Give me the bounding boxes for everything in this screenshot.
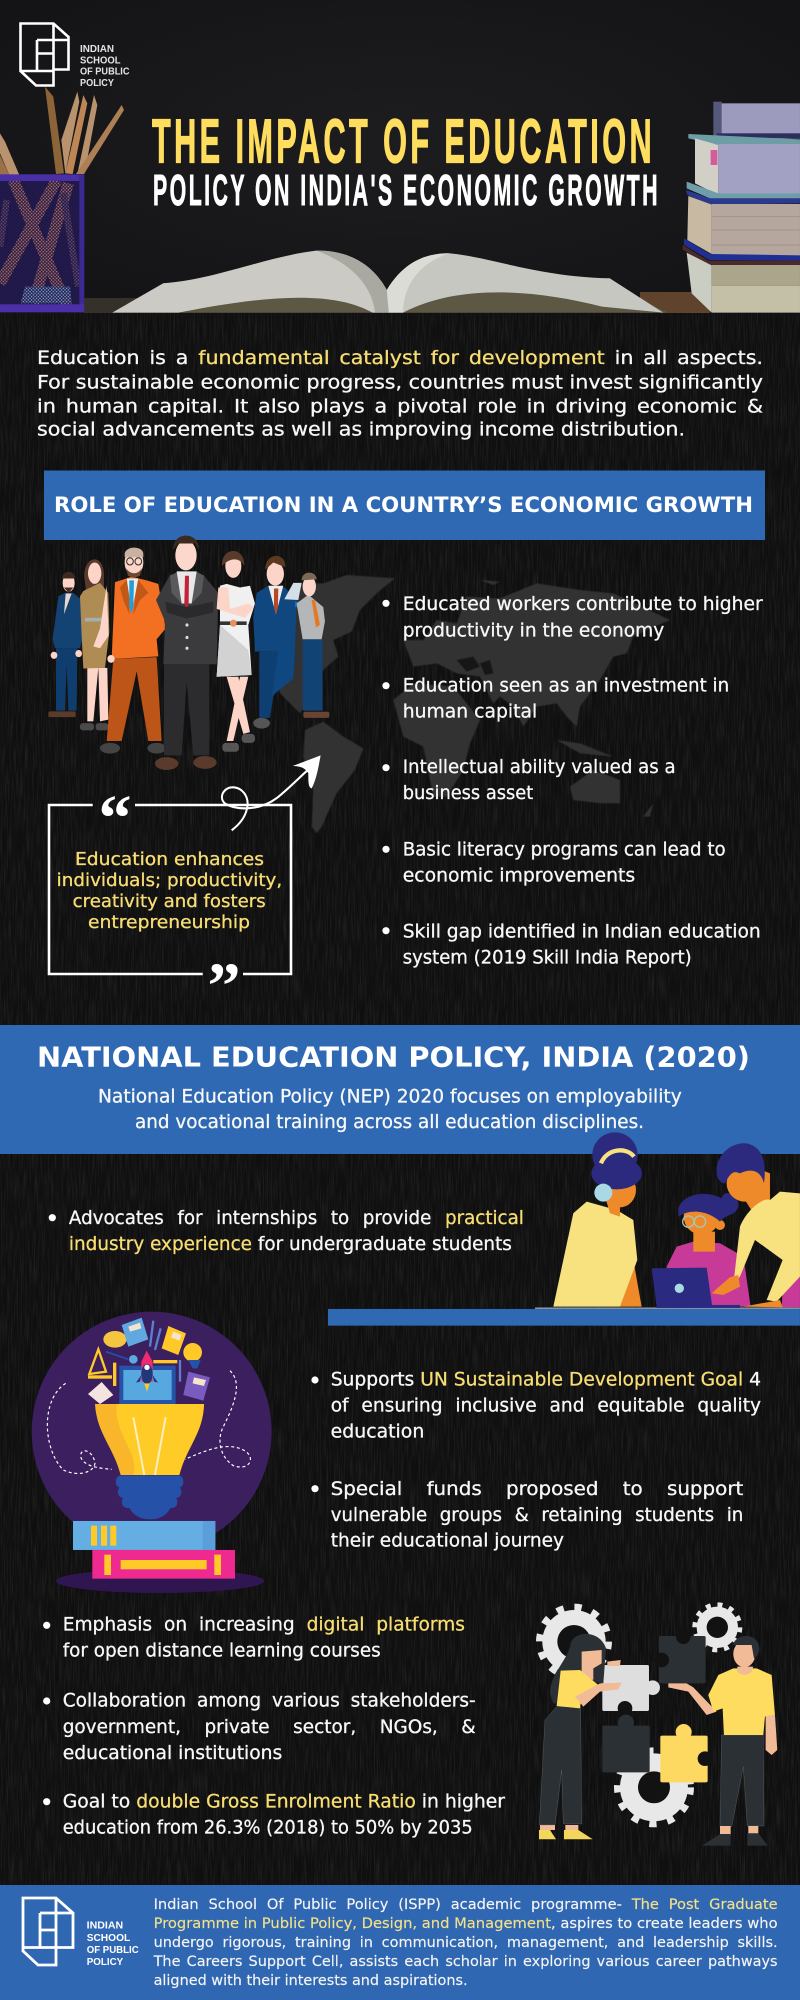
header panel xyxy=(0,0,800,313)
bullet list: SDG and funds xyxy=(311,1370,761,1552)
intro paragraph: For sustainable economic progress, countries must invest significantly xyxy=(37,372,763,393)
footer logo wordmark: OF PUBLIC xyxy=(87,1944,139,1956)
footer logo wordmark: POLICY xyxy=(87,1956,123,1968)
bullet list: role of education: business asset xyxy=(403,783,533,804)
bullet list: role of education: Skill gap identified in Indian education xyxy=(403,921,761,942)
footer logo wordmark: INDIAN xyxy=(87,1919,123,1931)
illustration: students with laptop xyxy=(328,1132,800,1326)
footer text: Indian School Of Public Policy (ISPP) academic programme- The Post Graduate xyxy=(154,1897,778,1913)
footer text xyxy=(153,1897,778,1989)
logo: Indian School of Public Policy xyxy=(20,24,130,89)
arrow: curly arrow to map xyxy=(222,755,321,830)
bullet list: role of education: economic improvements xyxy=(403,865,635,886)
logo wordmark: POLICY xyxy=(80,77,114,89)
intro paragraph: social advancements as well as improving income distribution. xyxy=(37,420,685,441)
quote text: individuals; productivity, xyxy=(57,871,282,891)
woman figure xyxy=(539,1634,622,1839)
band: national education policy: NATIONAL EDUCATION POLICY, INDIA (2020) xyxy=(37,1041,750,1074)
footer text: Programme in Public Policy, Design, and Management , aspires to create leaders who xyxy=(154,1916,778,1932)
world map xyxy=(270,575,670,833)
footer text: undergo rigorous, training in communication, management, and leadership skills. xyxy=(154,1935,778,1951)
quote text: Education enhances xyxy=(75,850,264,870)
icon: footer logo mark xyxy=(23,1898,73,1965)
dashed paths xyxy=(47,1371,250,1473)
gears xyxy=(539,1605,740,1824)
callout: quote box xyxy=(49,782,291,1023)
bullet list: role of education xyxy=(382,594,763,968)
bullet list: role of education: system (2019 Skill India Report) xyxy=(403,947,692,968)
person 3: orange suit xyxy=(100,548,166,754)
bullet list: SDG and funds: their educational journey xyxy=(331,1531,564,1552)
child xyxy=(667,1193,751,1307)
bullet list: digital, collaboration, enrolment: government, private sector, NGOs, & xyxy=(63,1717,476,1738)
heading: role of education: ROLE OF EDUCATION IN A COUNTRY’S ECONOMIC GROWTH xyxy=(54,493,753,518)
icon: opening quote: “ xyxy=(98,782,132,855)
book stack xyxy=(73,1521,235,1579)
right woman xyxy=(712,1143,800,1307)
bullet list: role of education: Intellectual ability valued as a xyxy=(403,757,676,778)
logo wordmark xyxy=(80,43,130,89)
logo wordmark: OF PUBLIC xyxy=(80,66,130,78)
bullet list: SDG and funds: vulnerable groups & retaining students in xyxy=(331,1505,743,1526)
footer text: aligned with their interests and aspirations. xyxy=(154,1973,468,1989)
puzzle pieces xyxy=(602,1629,712,1782)
bullet: internships xyxy=(49,1208,524,1255)
intro paragraph: in human capital. It also plays a pivotal role in driving economic & xyxy=(37,396,763,417)
table surface xyxy=(84,292,710,313)
intro paragraph xyxy=(37,348,763,441)
bullet list: digital, collaboration, enrolment: Emphasis on increasing digital platforms xyxy=(63,1615,465,1636)
heading: role of education xyxy=(44,470,765,540)
bullet list: role of education: Education seen as an investment in xyxy=(403,675,729,696)
footer text: The Careers Support Cell, assists each scholar in exploring various career pathways xyxy=(153,1954,778,1970)
logo wordmark: SCHOOL xyxy=(80,54,121,66)
logo wordmark: INDIAN xyxy=(80,43,114,55)
footer panel xyxy=(0,1885,800,2000)
bullet list: digital, collaboration, enrolment: Collaboration among various stakeholders- xyxy=(63,1691,476,1712)
person 5: white dress xyxy=(217,551,255,752)
person 1 xyxy=(48,572,84,717)
footer logo wordmark: SCHOOL xyxy=(87,1932,131,1944)
bullet list: SDG and funds: Supports UN Sustainable Development Goal 4 xyxy=(331,1370,761,1391)
person 6: navy suit xyxy=(253,556,308,729)
bullet list: digital, collaboration, enrolment xyxy=(43,1615,505,1839)
bullet list: SDG and funds: Special funds proposed to support xyxy=(331,1479,743,1500)
left woman xyxy=(553,1132,642,1307)
bullet list: SDG and funds: education xyxy=(331,1422,424,1443)
footer logo wordmark xyxy=(87,1919,139,1968)
bullet list: digital, collaboration, enrolment: for open distance learning courses xyxy=(63,1641,381,1662)
illustration: light bulb with books xyxy=(32,1312,272,1593)
bullet list: role of education: productivity in the economy xyxy=(403,620,664,642)
icon: pencils and mesh cup xyxy=(0,87,124,312)
icon: open book xyxy=(112,251,668,313)
person 4: centre grey suit xyxy=(155,536,218,770)
person 7: grey shirt xyxy=(297,573,329,718)
quote text xyxy=(57,850,282,933)
icon: closing quote: ” xyxy=(208,950,240,1023)
quote text: entrepreneurship xyxy=(88,913,250,933)
laptop xyxy=(652,1268,740,1308)
quote text: creativity and fosters xyxy=(73,892,266,912)
man figure xyxy=(668,1636,777,1846)
icon: logo mark xyxy=(20,24,68,86)
bullet list: digital, collaboration, enrolment: education from 26.3% (2018) to 50% by 2035 xyxy=(63,1818,473,1839)
band: national education policy xyxy=(0,1025,800,1154)
illustration: puzzle and gears teamwork xyxy=(539,1605,777,1846)
bullet list: SDG and funds: of ensuring inclusive and equitable quality xyxy=(331,1396,761,1417)
bullet: internships: Advocates for internships to provide practical xyxy=(69,1208,524,1229)
bullet list: digital, collaboration, enrolment: Goal to double Gross Enrolment Ratio in higher xyxy=(63,1792,505,1813)
person 2 xyxy=(80,559,109,730)
intro paragraph: Education is a fundamental catalyst for development in all aspects. xyxy=(37,348,763,369)
illustration: business people xyxy=(48,536,329,830)
band: national education policy: and vocational training across all education disciplines. xyxy=(135,1112,644,1133)
education icons xyxy=(88,1318,210,1404)
title xyxy=(152,107,660,215)
bullet list: digital, collaboration, enrolment: educational institutions xyxy=(63,1743,282,1764)
bullet list: role of education: Basic literacy programs can lead to xyxy=(403,839,726,860)
bullet: internships: industry experience for undergraduate students xyxy=(69,1234,512,1255)
bullet list: role of education: human capital xyxy=(403,702,537,723)
icon: stack of books xyxy=(683,102,800,313)
bulb xyxy=(95,1404,204,1519)
band: national education policy: National Education Policy (NEP) 2020 focuses on employability xyxy=(98,1087,682,1108)
bullet list: role of education: Educated workers contribute to higher xyxy=(403,594,763,615)
